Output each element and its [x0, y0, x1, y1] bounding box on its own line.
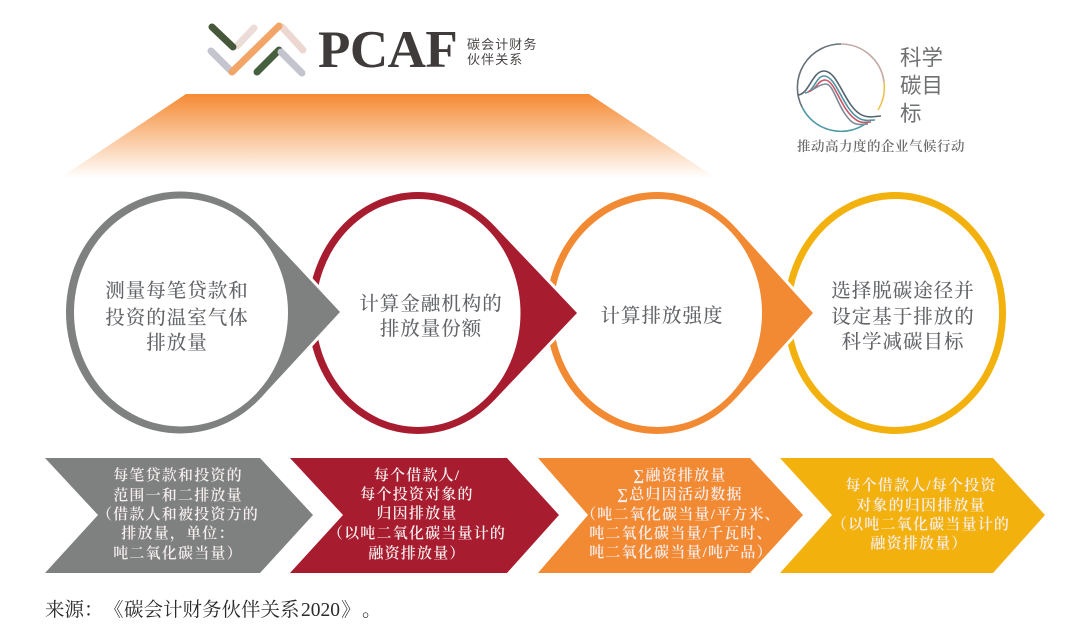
- PCAF Chinese name: [467, 37, 538, 67]
- step 4 text: 选择脱碳途径并: [831, 280, 975, 302]
- source note: 2020: [301, 600, 340, 621]
- source note: 》: [341, 599, 361, 621]
- gray chevron text: 排放量，单位：: [121, 524, 235, 542]
- step 2 text: [359, 293, 503, 340]
- gray chevron text: [97, 466, 259, 562]
- yellow chevron text: 融资排放量）: [870, 534, 968, 552]
- step 3: orange circle with arrow: [546, 192, 813, 434]
- step 4 text: [831, 280, 975, 353]
- step 2 text: 排放量份额: [380, 318, 482, 340]
- logo: PCAF: [211, 21, 538, 79]
- orange chevron text: [581, 466, 781, 561]
- PCAF Chinese name: 伙伴关系: [467, 52, 523, 67]
- orange chevron text: ∑总归因活动数据: [617, 485, 743, 503]
- orange chevron text: 吨二氧化碳当量/吨产品）: [589, 543, 773, 561]
- gray chevron text: 每笔贷款和投资的: [113, 466, 243, 484]
- step 3 text: 计算排放强度: [600, 305, 724, 327]
- step 1 text: [105, 280, 249, 354]
- step 2: red circle with arrow: [308, 192, 577, 434]
- step 4 text: 设定基于排放的: [831, 306, 975, 328]
- red chevron text: 每个借款人/: [374, 466, 460, 484]
- step 1 text: 投资的温室气体: [105, 307, 249, 329]
- source note: 碳会计财务伙伴关系: [124, 599, 300, 621]
- icon: SBT circle with curves: [797, 44, 884, 131]
- gray chevron text: （借款人和被投资方的: [97, 505, 259, 523]
- SBT Chinese name: [900, 46, 943, 126]
- gray chevron text: 范围一和二排放量: [113, 486, 243, 504]
- orange gradient trapezoid: [60, 94, 716, 178]
- SBT tagline: 推动高力度的企业气候行动: [797, 138, 965, 154]
- red chevron text: [328, 466, 506, 562]
- yellow chevron text: （以吨二氧化碳当量计的: [832, 515, 1010, 533]
- red chevron text: 融资排放量）: [368, 544, 466, 562]
- orange chevron text: （吨二氧化碳当量/平方米、: [581, 505, 781, 523]
- SBT Chinese name: 标: [900, 102, 922, 126]
- step 1: gray circle with arrow: [66, 192, 340, 434]
- source note: 来源：: [45, 599, 104, 621]
- gray chevron text: 吨二氧化碳当量）: [113, 544, 243, 562]
- logo: science based targets: [797, 44, 965, 154]
- icon: PCAF interlaced chevrons: [211, 26, 303, 73]
- step 4 text: 科学减碳目标: [841, 331, 965, 353]
- red chevron text: 归因排放量: [376, 504, 458, 522]
- chevron: red: [290, 458, 559, 573]
- yellow chevron text: 对象的归因排放量: [856, 496, 986, 514]
- step 2 text: 计算金融机构的: [359, 293, 503, 315]
- orange chevron text: 吨二氧化碳当量/千瓦时、: [589, 524, 773, 542]
- yellow chevron text: [832, 476, 1010, 552]
- red chevron text: （以吨二氧化碳当量计的: [328, 524, 506, 542]
- orange chevron text: ∑融资排放量: [634, 466, 726, 484]
- step 1 text: 排放量: [146, 332, 208, 354]
- step 4: yellow circle: [784, 192, 1006, 434]
- chevron: gray: [45, 458, 313, 573]
- chevron: orange: [538, 458, 803, 573]
- SBT Chinese name: 碳目: [900, 74, 943, 98]
- PCAF wordmark: PCAF: [318, 21, 457, 79]
- chevron: yellow: [780, 458, 1045, 573]
- SBT Chinese name: 科学: [900, 46, 943, 70]
- step 1 text: 测量每笔贷款和: [105, 280, 249, 302]
- yellow chevron text: 每个借款人/每个投资: [845, 476, 997, 494]
- red chevron text: 每个投资对象的: [360, 485, 474, 503]
- source note: 。: [362, 600, 382, 621]
- PCAF Chinese name: 碳会计财务: [467, 37, 538, 52]
- source note: 《: [104, 599, 124, 621]
